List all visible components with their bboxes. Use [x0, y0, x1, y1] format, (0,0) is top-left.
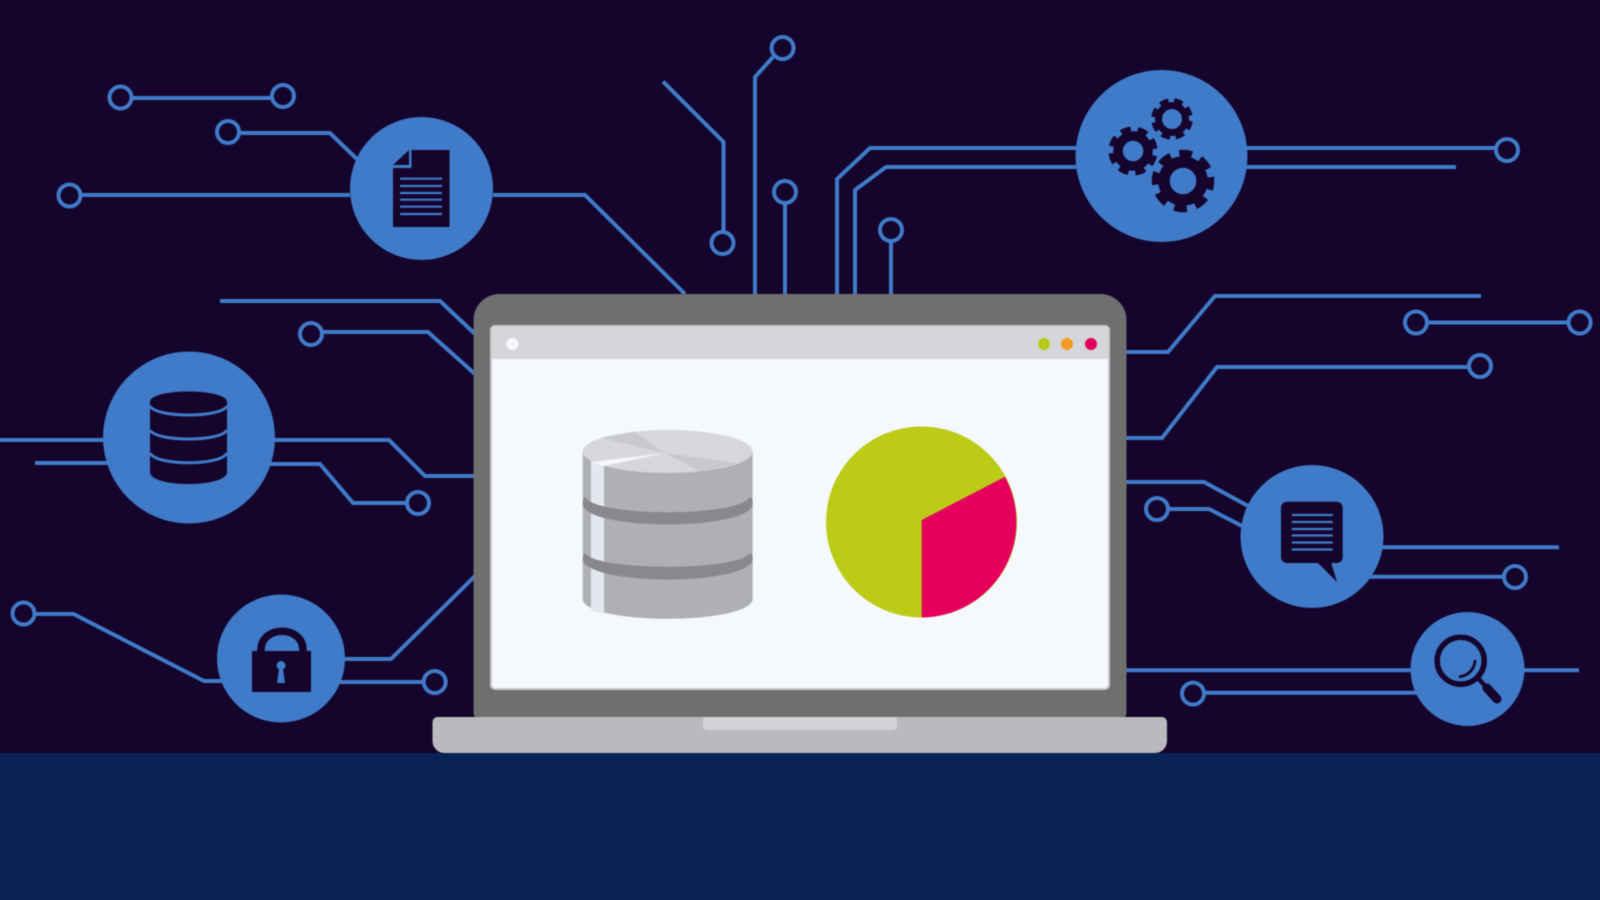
window title bar: [492, 327, 1108, 359]
icon: document: [350, 117, 493, 260]
database cylinder illustration: [583, 430, 753, 619]
pie chart: [826, 426, 1017, 618]
gear medium: [1107, 125, 1159, 177]
band upper: [583, 497, 753, 524]
icon: database: [103, 352, 275, 524]
icon: speech bubble: [1240, 465, 1384, 608]
circuit lines: top left: [58, 85, 685, 294]
icon: magnifier: [1410, 612, 1524, 726]
trackpad notch: [703, 717, 897, 730]
lower tier: [583, 560, 753, 619]
highlight stripe: [591, 460, 604, 614]
circuit lines: top right: [1126, 139, 1591, 438]
icon: gears: [1076, 70, 1248, 242]
circuit lines: top centre: [663, 37, 1080, 294]
laptop: [432, 294, 1167, 753]
darker wedges: [601, 432, 737, 471]
middle tier: [583, 505, 753, 572]
icon: padlock: [217, 594, 345, 722]
gear large: [1152, 150, 1214, 212]
disk top: [583, 430, 753, 473]
upper tier: [583, 452, 753, 516]
circuit lines: bottom left: [12, 576, 475, 693]
gear small: [1152, 99, 1192, 139]
floor band: [0, 753, 1600, 900]
laptop screen: [491, 326, 1109, 689]
circuit lines: left middle: [0, 301, 475, 514]
laptop base: [432, 717, 1167, 753]
circuit lines: bottom right: [1126, 482, 1579, 705]
laptop lid: [474, 294, 1126, 722]
band lower: [583, 553, 753, 580]
light sweep: [591, 453, 665, 466]
